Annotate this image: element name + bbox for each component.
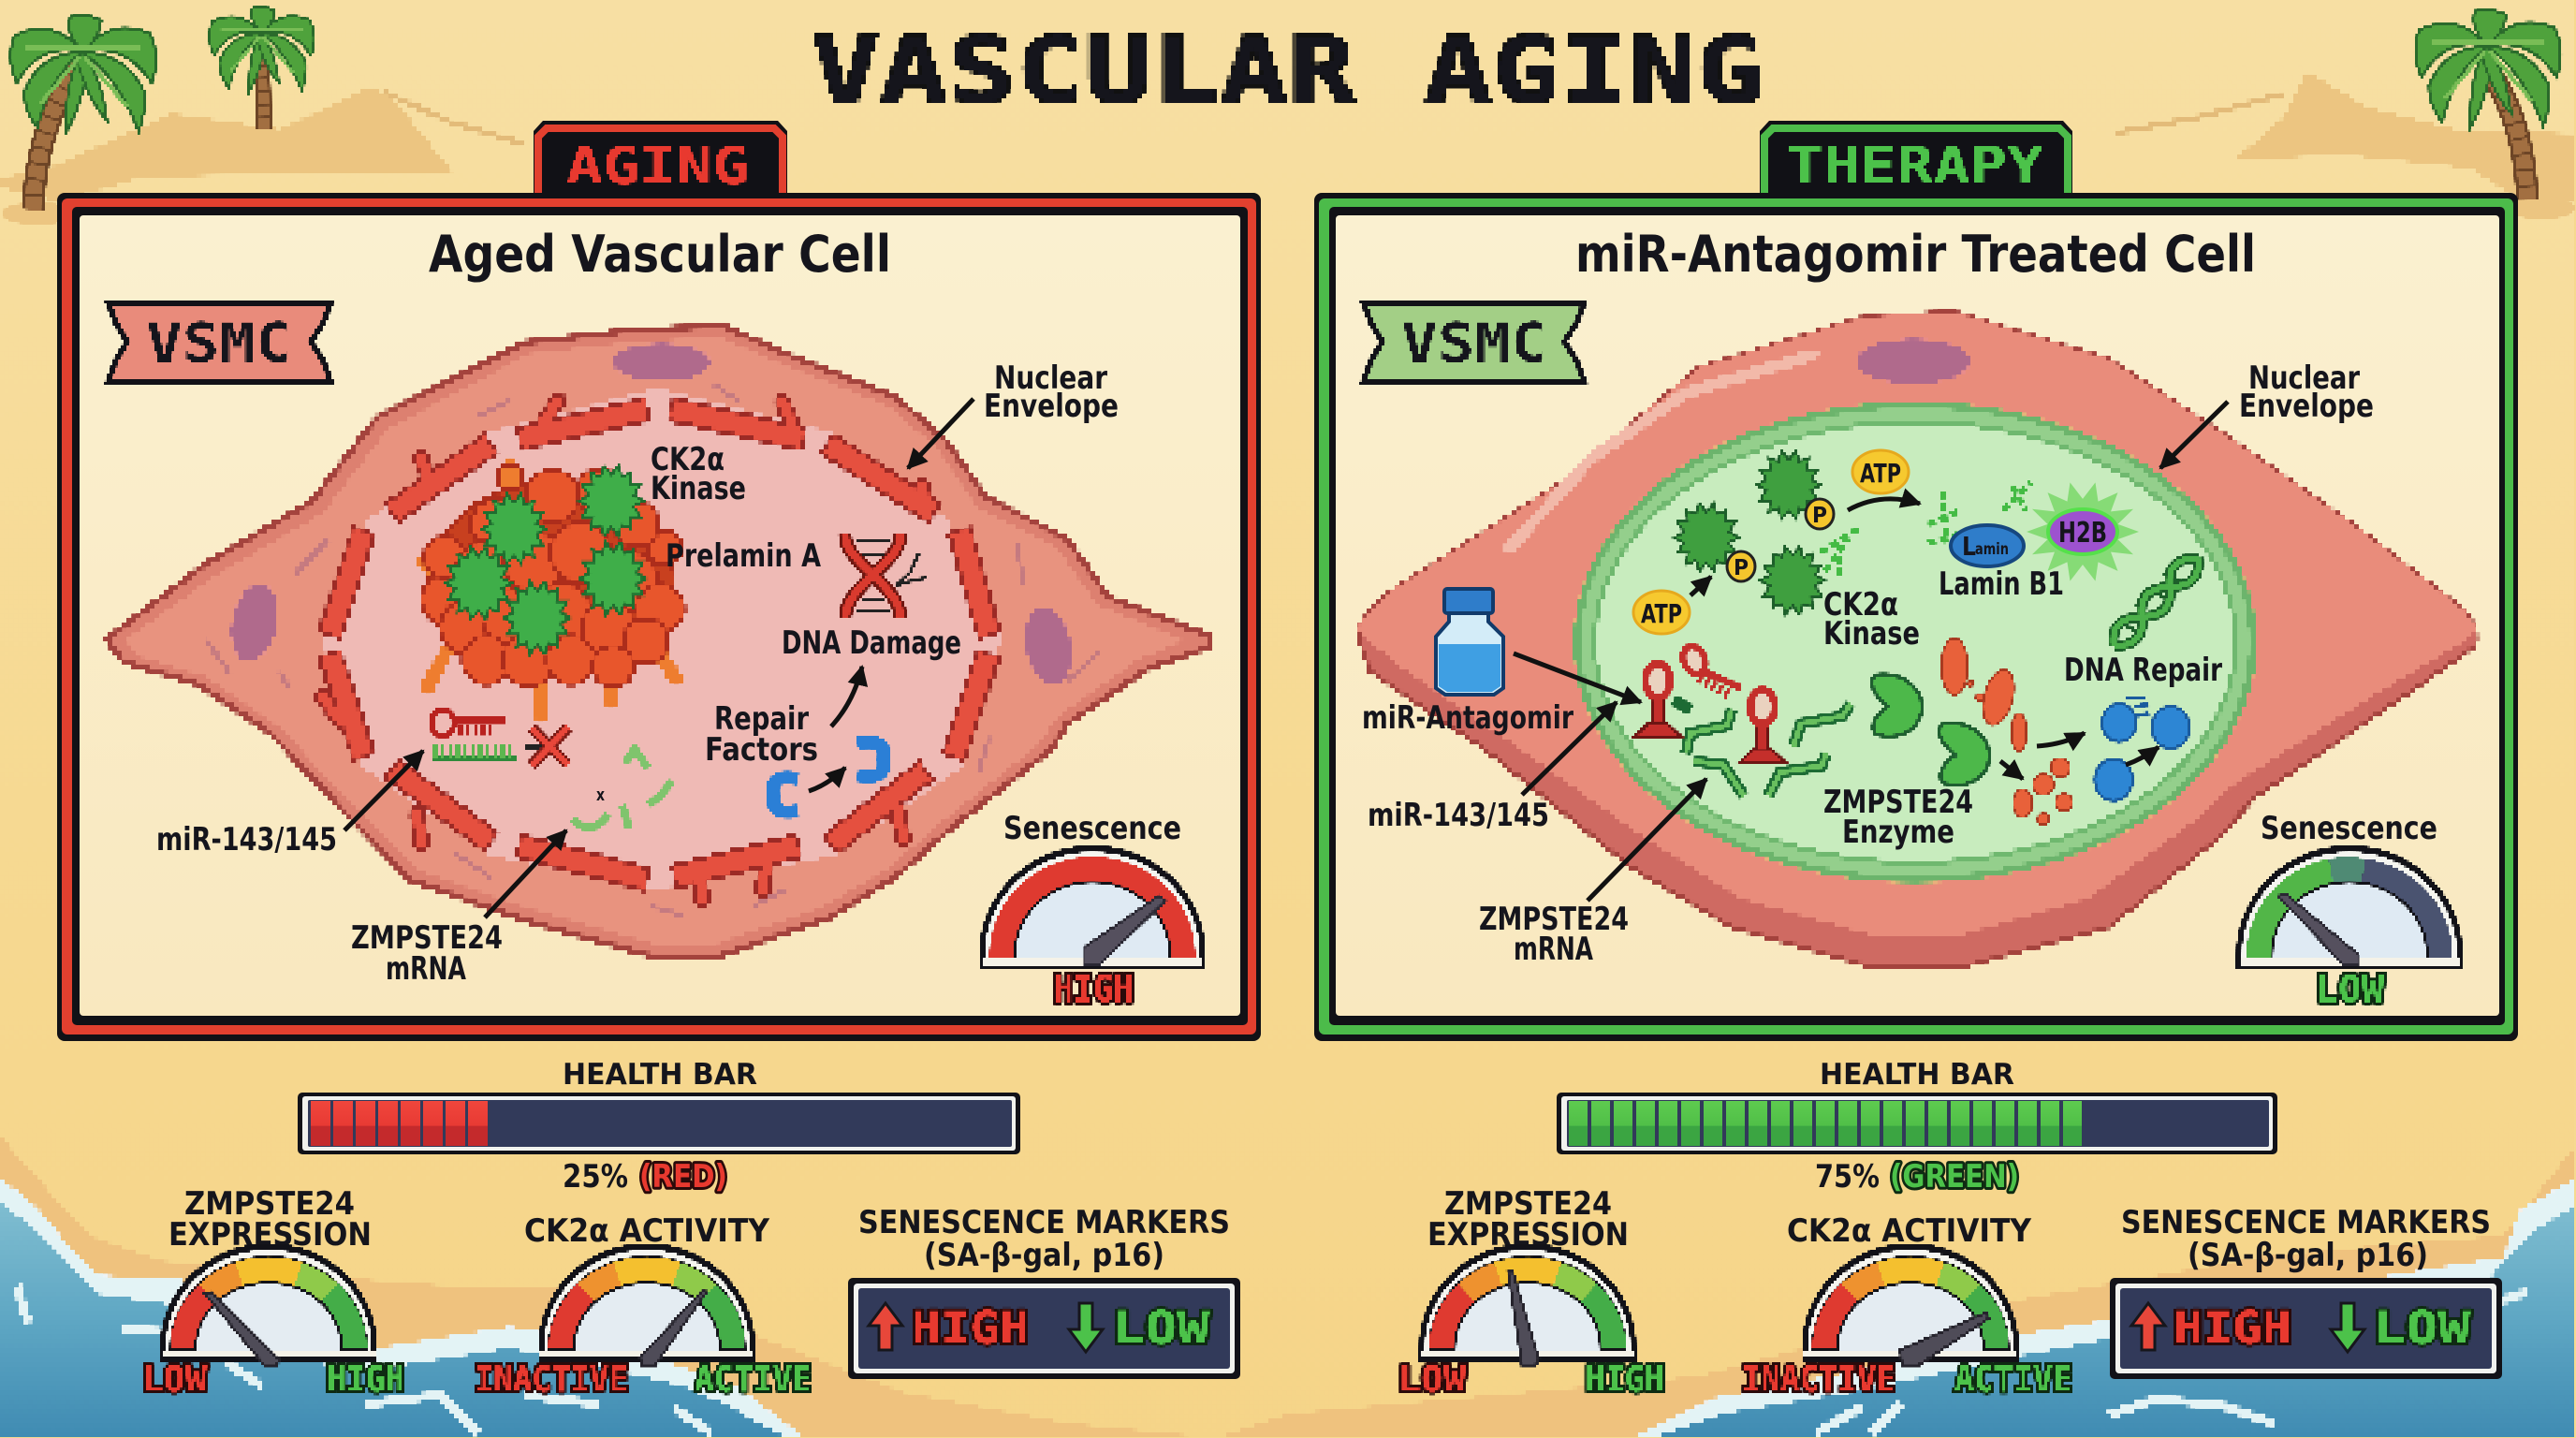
sea water [0,1203,2576,1438]
banner: VSMC [109,303,330,381]
DNA helix repaired [2114,558,2198,646]
banner: VSMC: VSMC [1401,311,1547,374]
nucleoplasm [335,403,988,875]
labels: mRNA [1514,931,1593,968]
cell nuclei spots [613,344,710,381]
tab: aging: AGING [566,136,749,196]
ZMPSTE24 enzyme beans [1872,675,1989,785]
labels: Envelope [984,388,1119,425]
fragmented nuclear envelope [322,401,929,899]
Lamin B1 [1951,525,2024,566]
Lamin B1: L [1962,531,1976,562]
labels: ZMPSTE24 [1823,784,1973,821]
Lamin B1: amin [1975,540,2009,559]
health bar: aging: HEALTH BAR [563,1058,757,1092]
labels: ZMPSTE24 [1479,901,1629,938]
senescence markers therapy: LOW [2374,1302,2470,1355]
senescence markers therapy: SENESCENCE MARKERS [2121,1204,2491,1241]
ZMPSTE24 mRNA squiggles [1674,700,1851,796]
bottle: miR-antagomir [1436,589,1503,695]
treated cell body [1358,312,2476,967]
degraded mRNA fragments [573,749,672,829]
panel heading: miR-Antagomir Treated Cell [1575,225,2256,284]
gauge: ZMPSTE24 expression aging: ZMPSTE24 [184,1185,355,1223]
H2B glow [2027,482,2139,581]
senescence markers aging: (SA-β-gal, p16) [924,1237,1164,1274]
dunes top right [2232,71,2576,200]
aged cell body and aggregate [107,326,1211,958]
labels: Kinase [1823,615,1920,653]
prelamin fragments [1941,638,2072,825]
ATP badges: ATP [1641,598,1682,629]
nucleus with restored envelope [1573,402,2257,883]
gauge: CK2 activity therapy: ACTIVE [1954,1358,2072,1400]
gauge: CK2 activity aging: CK2α ACTIVITY [524,1212,769,1250]
tab: aging [534,121,787,201]
labels: Nuclear [2248,360,2360,397]
labels: miR-Antagomir [1362,699,1573,737]
senescence gauge: high: Senescence [1003,810,1181,847]
gauge: CK2 activity aging: INACTIVE [475,1358,628,1400]
senescence gauge: high [979,810,1206,1011]
gauge: ZMPSTE24 expression therapy: EXPRESSION [1427,1216,1629,1254]
H2B glow: H2B [2058,517,2107,550]
wet sand [0,1136,2576,1438]
labels: Prelamin A [666,537,822,575]
CK2 alpha kinase group [1675,451,1824,614]
repair factors [773,742,884,812]
miRNA hairpin and blocked mRNA [432,710,568,765]
palm tree 2 [210,7,315,129]
health bar: therapy: HEALTH BAR [1820,1058,2014,1092]
gauge: ZMPSTE24 expression aging [141,1185,404,1400]
tab: therapy [1760,121,2072,201]
labels: DNA Repair [2064,652,2222,689]
banner: VSMC [1364,303,1584,381]
banner: VSMC: VSMC [146,311,292,374]
gauge: CK2 activity therapy [1742,1212,2072,1400]
tab: therapy: THERAPY [1787,136,2043,196]
labels: miR-143/145 [156,821,337,858]
panel: therapy [1314,121,2518,1041]
gauge: ZMPSTE24 expression therapy: HIGH [1586,1358,1664,1400]
gauge: CK2 activity aging [475,1212,812,1400]
DNA damage icon [845,534,927,618]
health bar: aging [298,1058,1020,1196]
senescence gauge: low: Senescence [2261,810,2437,847]
senescence gauge: low [2236,810,2463,1011]
dune ridge line left [384,92,525,144]
labels: Lamin B1 [1939,565,2064,603]
arrows [1514,402,2228,901]
labels: mRNA [386,950,466,988]
cytoplasm marks [205,385,1100,916]
gauge: CK2 activity therapy: INACTIVE [1742,1358,1895,1400]
labels: x [596,785,605,805]
gauge: ZMPSTE24 expression aging: EXPRESSION [168,1216,372,1254]
labels: Envelope [2239,388,2374,425]
senescence markers aging: HIGH [912,1302,1029,1355]
palm tree 3 [2415,10,2575,219]
labels: DNA Damage [782,624,961,662]
health bar: aging: (RED) [639,1158,727,1196]
dune ridge line right [2115,94,2284,133]
senescence markers aging: SENESCENCE MARKERS [858,1204,1230,1241]
gauge: CK2 activity aging: ACTIVE [695,1358,812,1400]
senescence markers therapy: HIGH [2174,1302,2291,1355]
senescence markers therapy [2110,1204,2502,1379]
aged cell body [107,326,1211,958]
gauge: ZMPSTE24 expression therapy: LOW [1398,1358,1466,1400]
palm tree 1 [2,16,156,225]
foam streaks [17,1285,2527,1432]
senescence markers therapy: (SA-β-gal, p16) [2188,1237,2428,1274]
health bar: therapy [1557,1058,2277,1196]
ATP badges: ATP [1860,458,1901,489]
sparks [1821,482,2031,576]
labels: ZMPSTE24 [351,919,503,957]
health bar: aging: 25% [563,1158,628,1196]
health bar: therapy: (GREEN) [1890,1158,2019,1196]
panel heading: Aged Vascular Cell [429,225,891,284]
sea foam [0,1178,2576,1438]
arrows [344,399,973,917]
gauge: ZMPSTE24 expression aging: HIGH [327,1358,404,1400]
gauge: CK2 activity therapy: CK2α ACTIVITY [1787,1212,2031,1250]
aged cell fine icons [432,466,927,829]
labels: Kinase [651,470,746,507]
labels: Enzyme [1842,814,1954,851]
gauge: ZMPSTE24 expression aging: LOW [141,1358,207,1400]
gauge: ZMPSTE24 expression therapy [1398,1185,1664,1400]
title: VASCULAR AGING [812,18,1764,125]
health bar: therapy: 75% [1815,1158,1880,1196]
labels: Repair [714,700,809,738]
treated cell fine icons [1634,451,2198,825]
dunes top left [0,86,452,201]
labels [1362,360,2374,968]
hairpin antagomirs [1634,643,1786,763]
senescence gauge: low: LOW [2316,968,2385,1011]
gauge: ZMPSTE24 expression therapy: ZMPSTE24 [1444,1185,1612,1223]
senescence gauge: high: HIGH [1053,968,1134,1011]
prelamin A aggregate [421,463,684,716]
labels: miR-143/145 [1368,797,1549,834]
panel: aging [57,121,1261,1041]
ATP badges [1633,450,1909,634]
phospho tags [1727,499,1834,581]
repair products [2095,697,2189,800]
labels [156,360,1119,988]
senescence markers aging: LOW [1113,1302,1209,1355]
CK2 alpha stars [446,466,646,653]
labels: Factors [705,731,818,769]
senescence markers aging [848,1204,1240,1379]
phospho tags: P [1734,556,1749,580]
labels: CK2α [651,441,724,478]
phospho tags: P [1812,504,1827,528]
labels: CK2α [1823,586,1898,624]
labels: Nuclear [994,360,1107,397]
